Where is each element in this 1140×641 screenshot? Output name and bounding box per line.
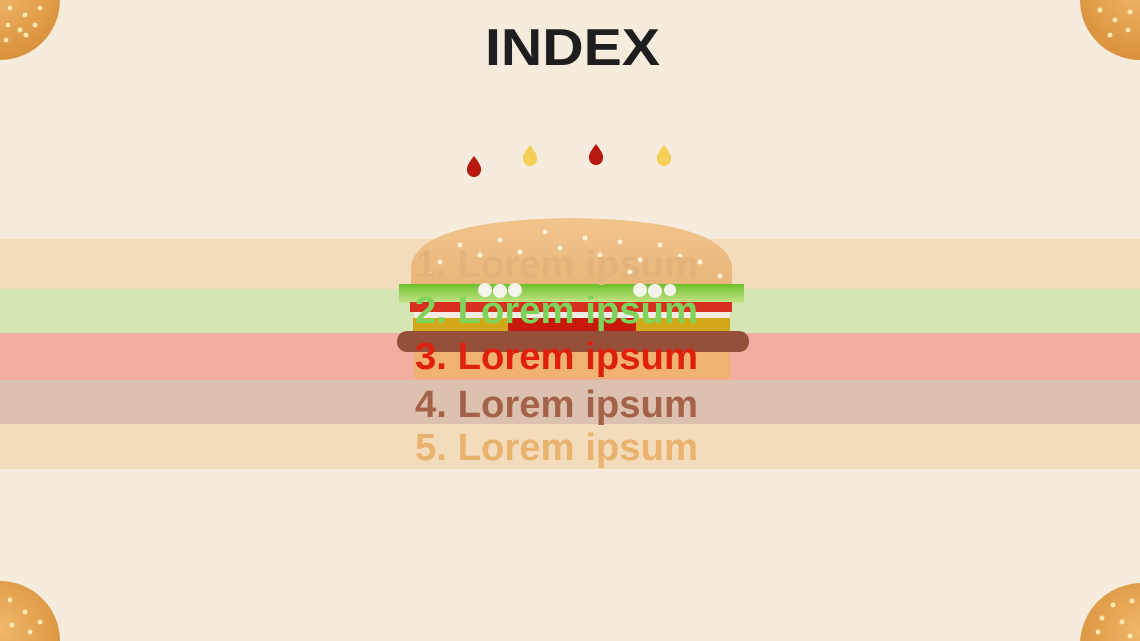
burger <box>397 218 749 379</box>
bands <box>0 239 1140 469</box>
item 1: 1. Lorem ipsum <box>415 244 698 286</box>
title: INDEX <box>485 19 660 77</box>
sauce drops <box>467 144 671 177</box>
item 3: 3. Lorem ipsum <box>415 336 698 378</box>
corner bun top-right <box>1080 0 1140 60</box>
item 4: 4. Lorem ipsum <box>415 384 698 426</box>
corner bun top-left <box>0 0 60 60</box>
index list <box>415 244 698 469</box>
item 2: 2. Lorem ipsum <box>415 290 698 332</box>
item 5: 5. Lorem ipsum <box>415 427 698 469</box>
corner bun bottom-left <box>0 581 60 641</box>
corner bun bottom-right <box>1080 583 1140 641</box>
